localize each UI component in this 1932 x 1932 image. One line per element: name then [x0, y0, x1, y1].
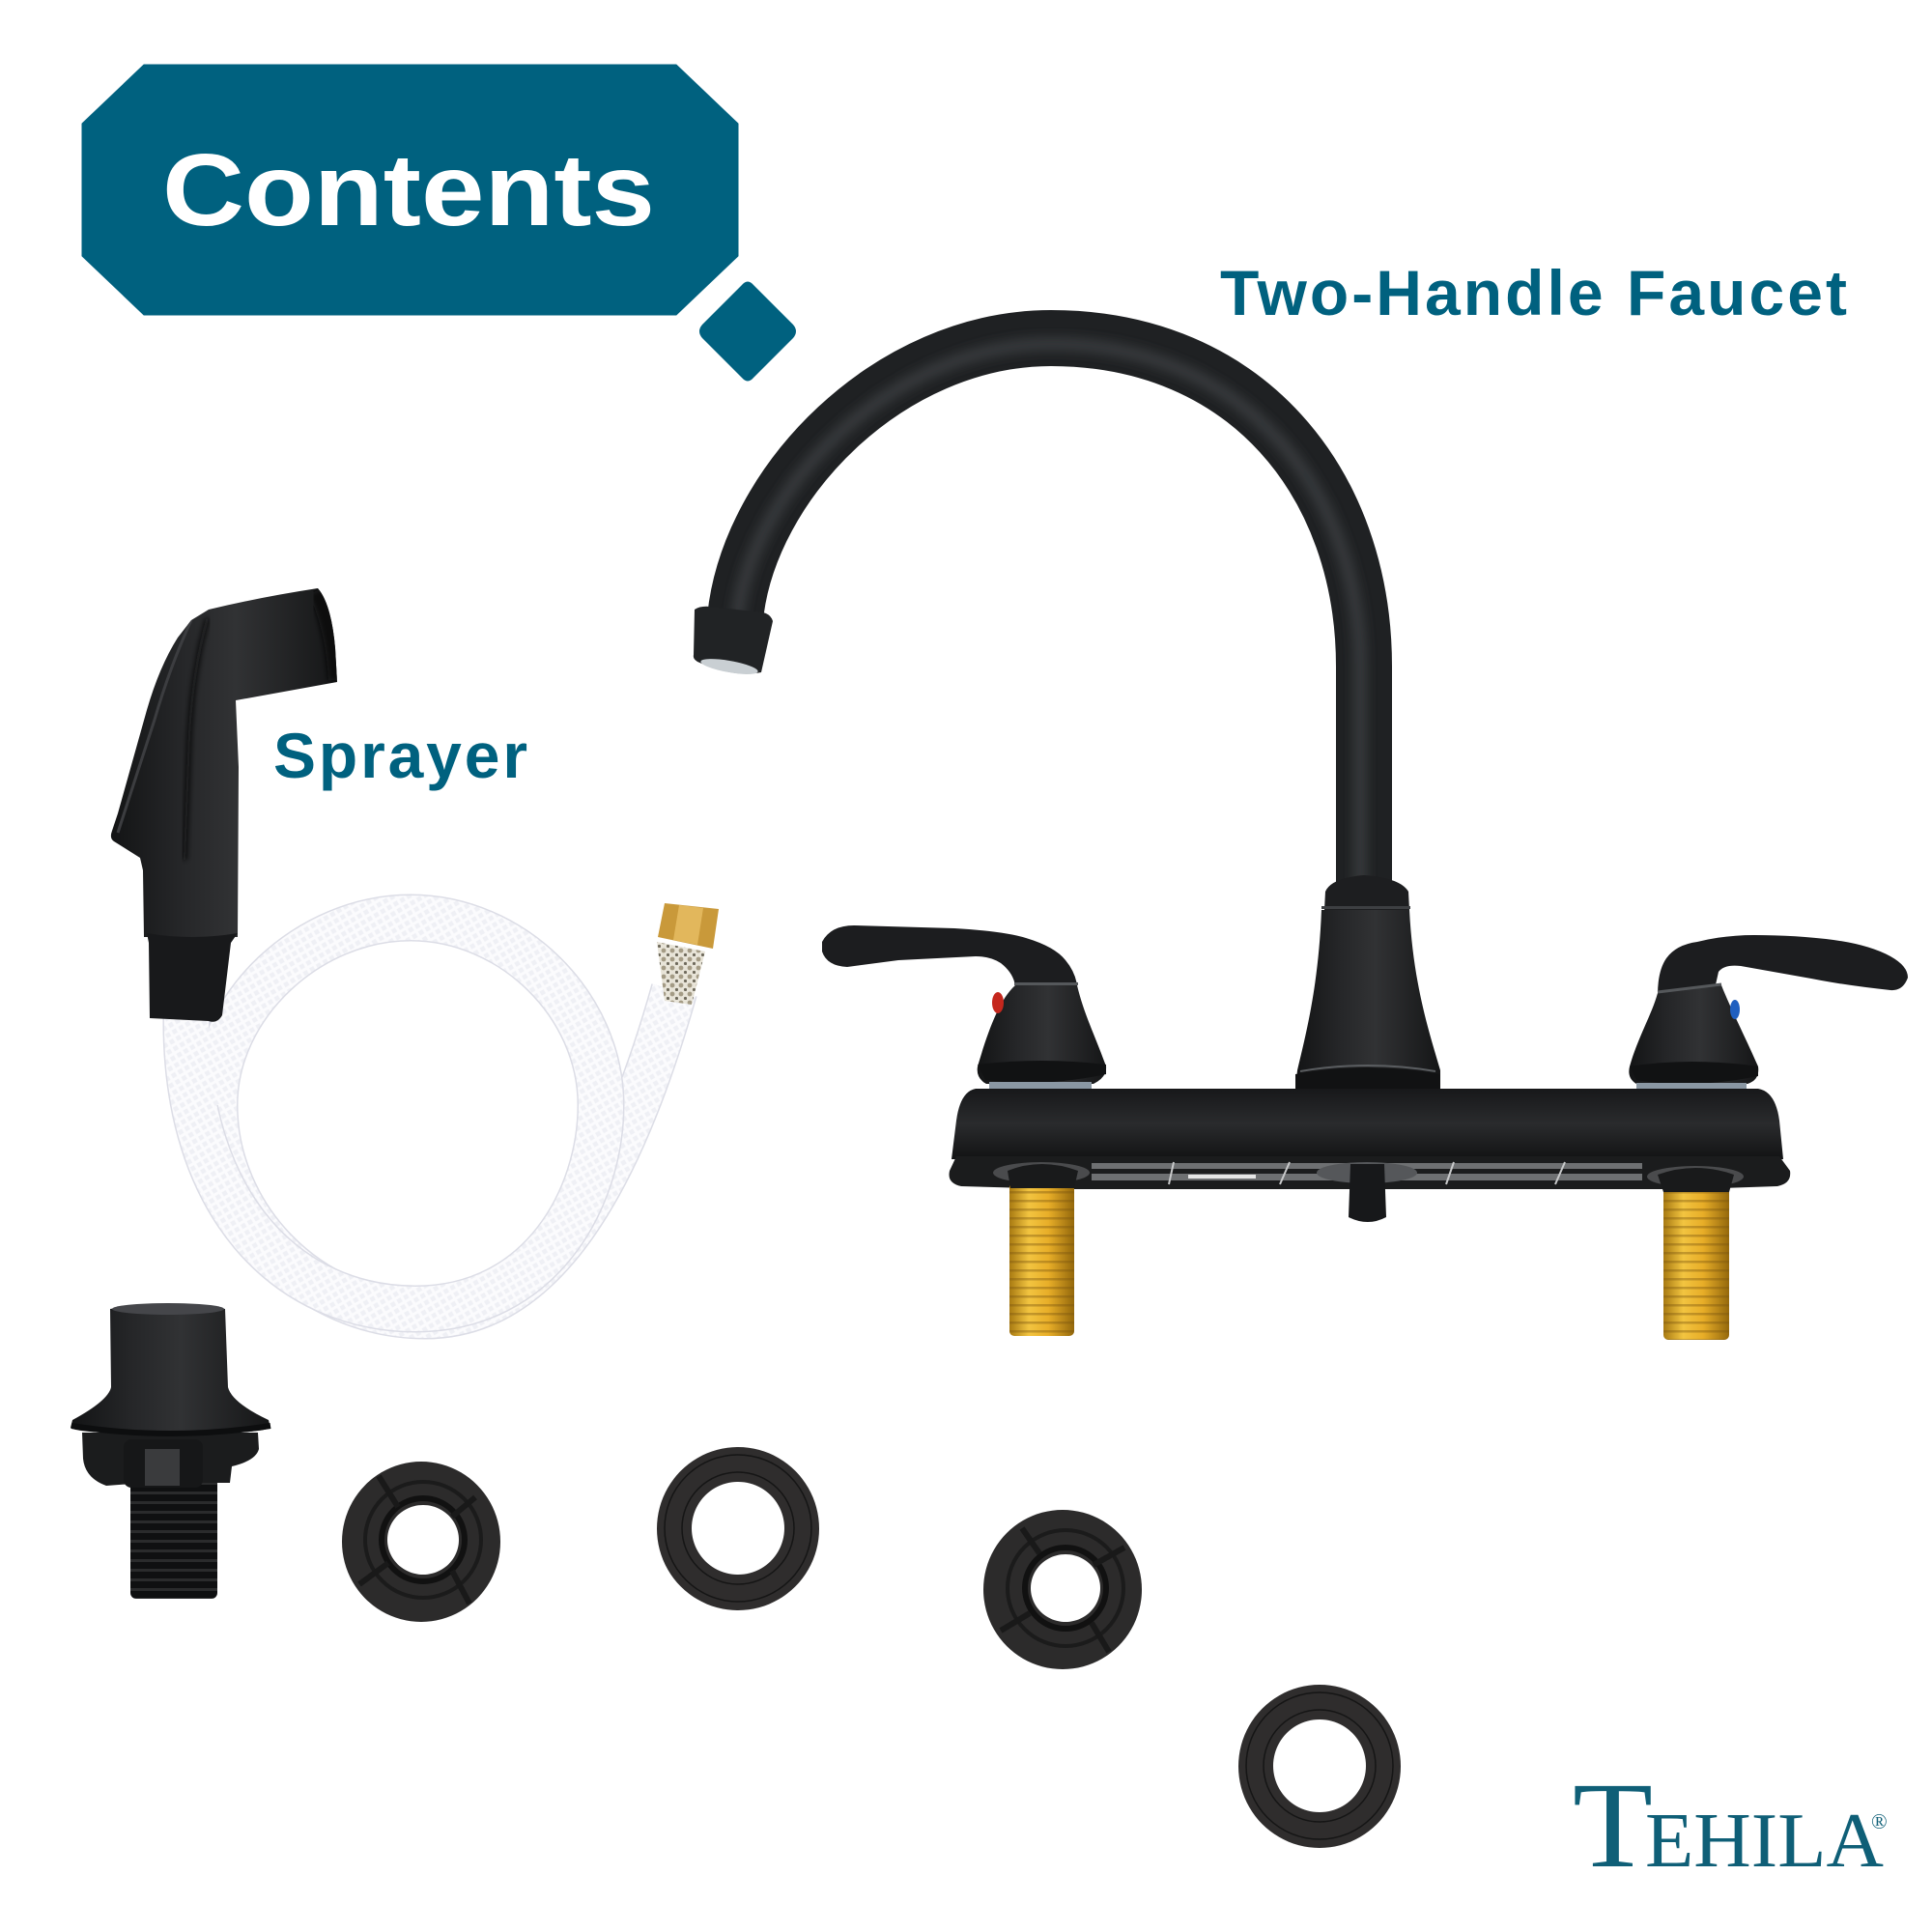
brass nut	[658, 903, 719, 949]
underside	[949, 1156, 1790, 1189]
inner loop	[214, 990, 674, 1316]
threaded stem	[130, 1478, 217, 1599]
centre riser	[1295, 875, 1440, 1090]
body	[978, 985, 1106, 1084]
lock nut 2	[983, 1510, 1142, 1669]
left brass post	[1008, 1164, 1078, 1336]
logo: Tehila: EHILA	[1645, 1799, 1884, 1884]
body	[1629, 985, 1758, 1084]
sprayer nut	[147, 933, 238, 1022]
badge octagon	[82, 65, 738, 315]
collar	[71, 1304, 270, 1435]
title: Contents	[162, 133, 655, 247]
lever	[822, 925, 1077, 987]
sprayer	[111, 588, 337, 1022]
two-handle faucet	[694, 338, 1908, 1340]
rubber washer 1	[657, 1447, 819, 1610]
spout	[735, 338, 1364, 884]
label: Sprayer: Sprayer	[273, 720, 527, 791]
header badge: Contents	[82, 65, 796, 381]
left handle	[822, 925, 1106, 1089]
lever	[1658, 935, 1908, 995]
hose fitting	[657, 903, 719, 1005]
lock nut 1	[342, 1462, 500, 1622]
red indicator	[992, 992, 1004, 1013]
sprayer head	[111, 588, 337, 937]
diamond accent	[699, 282, 796, 381]
aerator	[694, 607, 773, 677]
logo: Tehila: T	[1573, 1758, 1653, 1893]
centre stud	[1349, 1164, 1386, 1222]
logo: Tehila: ®	[1871, 1809, 1888, 1833]
rubber washer 2	[1238, 1685, 1401, 1848]
blue indicator	[1730, 1000, 1740, 1019]
braided connector	[657, 942, 705, 1005]
wings	[82, 1433, 259, 1486]
right brass post	[1658, 1168, 1734, 1340]
sprayer hose	[186, 918, 674, 1316]
deck plate	[949, 1089, 1790, 1189]
logo: Tehila	[1573, 1758, 1888, 1893]
right handle	[1629, 935, 1908, 1089]
outer loop	[186, 918, 601, 1309]
label: Two-Handle Faucet: Two-Handle Faucet	[1220, 257, 1847, 328]
mounting base	[71, 1303, 270, 1599]
